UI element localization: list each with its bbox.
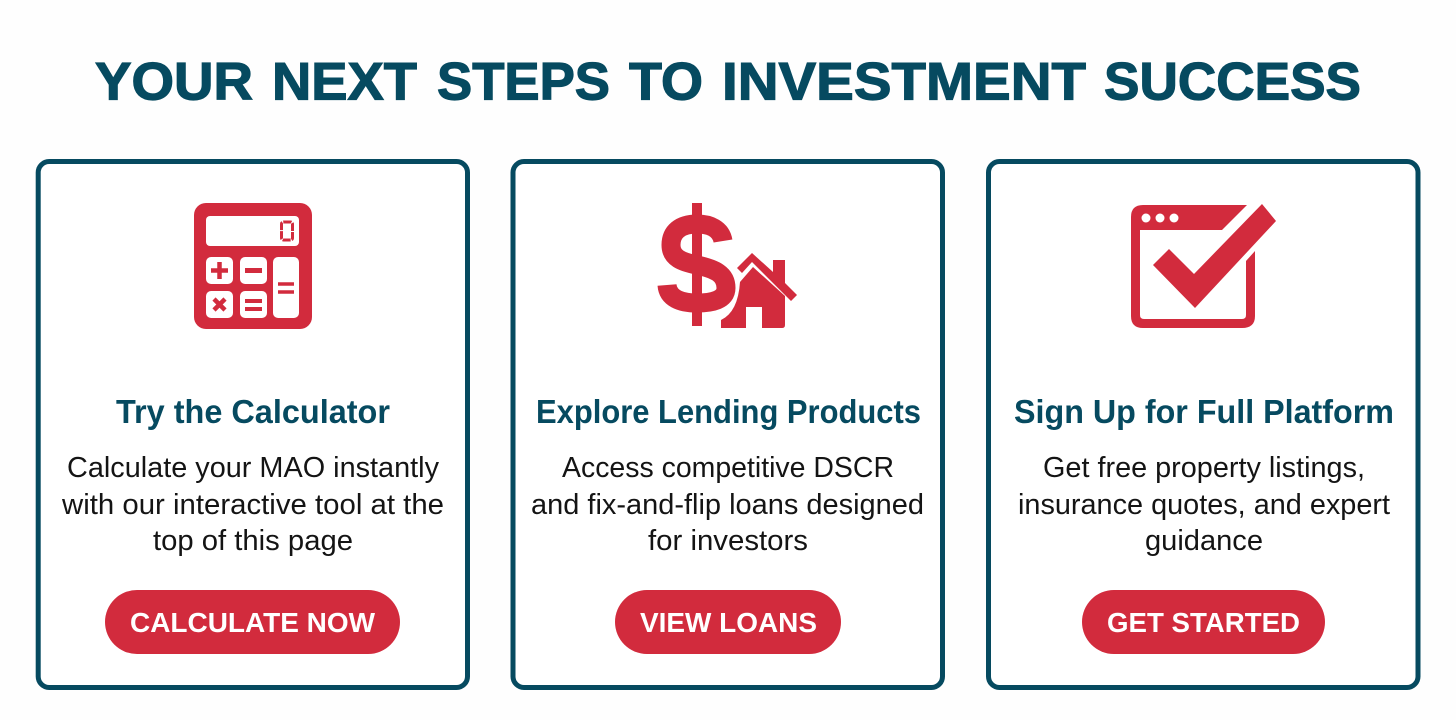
card border: [38, 162, 467, 688]
title: YOUR: [95, 52, 253, 112]
icon: dollar and house: [667, 203, 797, 328]
heading: Sign Up for Full Platform: [1014, 393, 1394, 430]
button: CALCULATE NOW: [130, 607, 376, 638]
button: VIEW LOANS: [640, 607, 817, 638]
title: NEXT: [272, 52, 417, 112]
panel: try the calculator: [38, 162, 467, 688]
card border: [513, 162, 942, 688]
title: STEPS: [437, 52, 610, 112]
title: TO: [629, 52, 703, 112]
description: Calculate your MAO instantly: [67, 452, 439, 484]
description: Get free property listings,: [1043, 452, 1365, 484]
icon: browser window with check mark: [1131, 204, 1276, 328]
icon: calculator: [194, 203, 312, 329]
description: for investors: [648, 525, 808, 557]
description: and fix-and-flip loans designed: [531, 489, 924, 521]
button: [1082, 590, 1325, 654]
title: INVESTMENT: [722, 52, 1086, 112]
button: GET STARTED: [1107, 607, 1300, 638]
title: [95, 52, 1361, 112]
description: [61, 452, 444, 557]
heading: Explore Lending Products: [536, 393, 921, 430]
title: SUCCESS: [1104, 52, 1361, 112]
description: top of this page: [153, 525, 353, 557]
description: [1018, 452, 1390, 557]
description: with our interactive tool at the: [61, 489, 444, 521]
description: insurance quotes, and expert: [1018, 489, 1390, 521]
description: guidance: [1145, 525, 1263, 557]
description: [531, 452, 924, 557]
panel: sign up for full platform: [988, 162, 1418, 688]
panel: explore lending products: [513, 162, 942, 688]
button: [615, 590, 841, 654]
heading: Try the Calculator: [116, 393, 390, 430]
description: Access competitive DSCR: [562, 452, 894, 484]
button: [105, 590, 400, 654]
card border: [988, 162, 1418, 688]
